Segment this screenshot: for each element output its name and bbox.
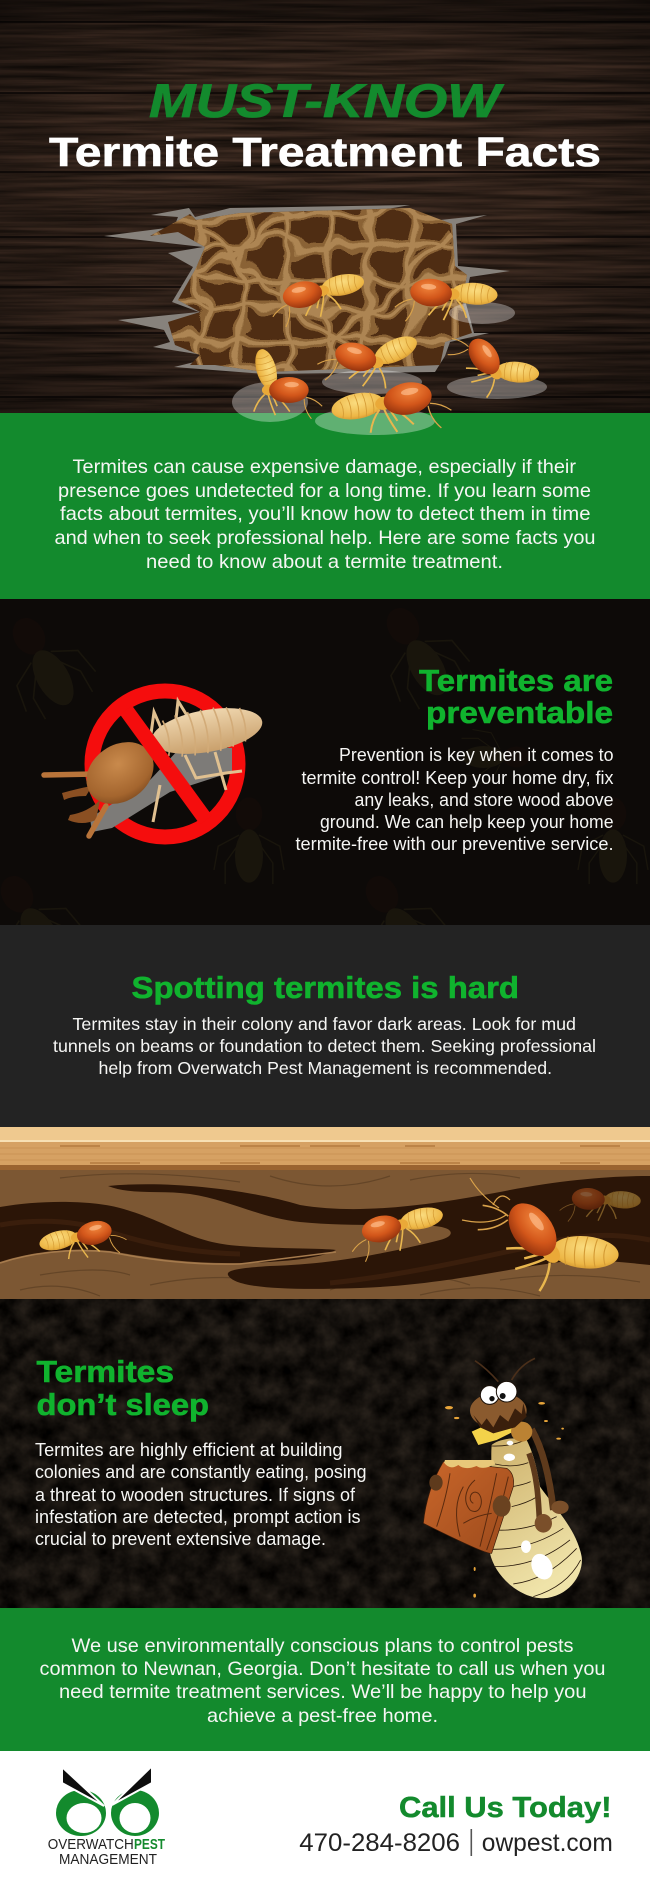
panel: closing message on green bbox=[0, 1608, 650, 1751]
heading: Spotting termites is hard: Spotting termites is hard bbox=[132, 970, 519, 1005]
body text: prevention: any leaks, and store wood above bbox=[354, 790, 614, 810]
body text: spotting bbox=[53, 1014, 596, 1078]
contact details: 470-284-8206 bbox=[299, 1829, 460, 1857]
closing paragraph: achieve a pest-free home. bbox=[207, 1705, 438, 1727]
illustration: cartoon termite eating wood bbox=[423, 1358, 582, 1598]
body text: constant eating: a threat to wooden structures. If signs of bbox=[35, 1485, 356, 1505]
panel: spotting termites is hard bbox=[0, 925, 650, 1127]
panel: termites don't sleep bbox=[0, 1299, 650, 1608]
title: Termite Treatment Facts: Termite Treatment Facts bbox=[49, 129, 601, 175]
logo: Overwatch Pest Management: MANAGEMENT bbox=[59, 1852, 157, 1868]
intro paragraph: need to know about a termite treatment. bbox=[146, 551, 503, 573]
illustration: termite nest tunnels bbox=[104, 205, 510, 374]
closing paragraph: We use environmentally conscious plans to control pests bbox=[72, 1635, 574, 1657]
body text: prevention: ground. We can help keep your home bbox=[320, 812, 614, 832]
heading: Termites are preventable: Termites are bbox=[419, 663, 613, 698]
logo: Overwatch Pest Management: OVERWATCH bbox=[48, 1837, 134, 1853]
panel: intro text on green bbox=[0, 413, 650, 599]
body text: constant eating: Termites are highly efficient at building bbox=[35, 1440, 342, 1460]
heading: Termites are preventable: preventable bbox=[426, 695, 613, 730]
body text: constant eating: colonies and are constantly eating, posing bbox=[35, 1462, 366, 1482]
logo: Overwatch Pest Management bbox=[48, 1766, 165, 1868]
body text: prevention: Prevention is key when it comes to bbox=[339, 745, 614, 765]
body text: constant eating bbox=[35, 1440, 366, 1549]
panel: hero header with wood background bbox=[0, 0, 650, 413]
body text: prevention: termite control! Keep your home dry, fix bbox=[302, 768, 614, 788]
logo: Overwatch Pest Management: PEST bbox=[134, 1837, 165, 1853]
icon: no-termite prohibition sign bbox=[44, 691, 266, 837]
body text: spotting: Termites stay in their colony and favor dark areas. Look for mud bbox=[72, 1014, 576, 1034]
heading: Termites don't sleep bbox=[36, 1354, 209, 1422]
contact details: owpest.com bbox=[482, 1829, 613, 1857]
heading: Termites don't sleep: Termites bbox=[36, 1354, 174, 1389]
body text: spotting: help from Overwatch Pest Management is recommended. bbox=[98, 1058, 552, 1078]
closing paragraph: need termite treatment services. We’ll be happy to help you bbox=[59, 1681, 586, 1703]
closing paragraph: common to Newnan, Georgia. Don’t hesitate to call us when you bbox=[40, 1658, 606, 1680]
intro paragraph: facts about termites, you’ll know how to detect them in time bbox=[60, 503, 590, 525]
illustration: wood cross-section with termites bbox=[0, 1127, 650, 1299]
panel: footer bbox=[0, 1751, 650, 1889]
body text: spotting: tunnels on beams or foundation to detect them. Seeking professional bbox=[53, 1036, 596, 1056]
call to action heading: Call Us Today! bbox=[399, 1792, 612, 1824]
body text: prevention: termite-free with our preventive service. bbox=[296, 834, 614, 854]
intro paragraph: and when to seek professional help. Here are some facts you bbox=[54, 527, 596, 549]
body text: prevention bbox=[296, 745, 614, 854]
contact details bbox=[299, 1829, 613, 1857]
intro paragraph: Termites can cause expensive damage, especially if their bbox=[72, 456, 577, 478]
intro paragraph bbox=[54, 456, 596, 573]
illustration: termites and shadow ovals on the nest edge bbox=[232, 270, 547, 448]
body text: constant eating: infestation are detected, prompt action is bbox=[35, 1507, 360, 1527]
body text: constant eating: crucial to prevent extensive damage. bbox=[35, 1529, 326, 1549]
title: Must-Know: MUST-KNOW bbox=[149, 74, 504, 127]
closing paragraph bbox=[40, 1635, 606, 1727]
panel: termites are preventable bbox=[0, 590, 650, 983]
heading: Termites don't sleep: don’t sleep bbox=[36, 1387, 209, 1422]
intro paragraph: presence goes undetected for a long time. If you learn some bbox=[58, 480, 591, 502]
heading: Termites are preventable bbox=[419, 663, 613, 730]
